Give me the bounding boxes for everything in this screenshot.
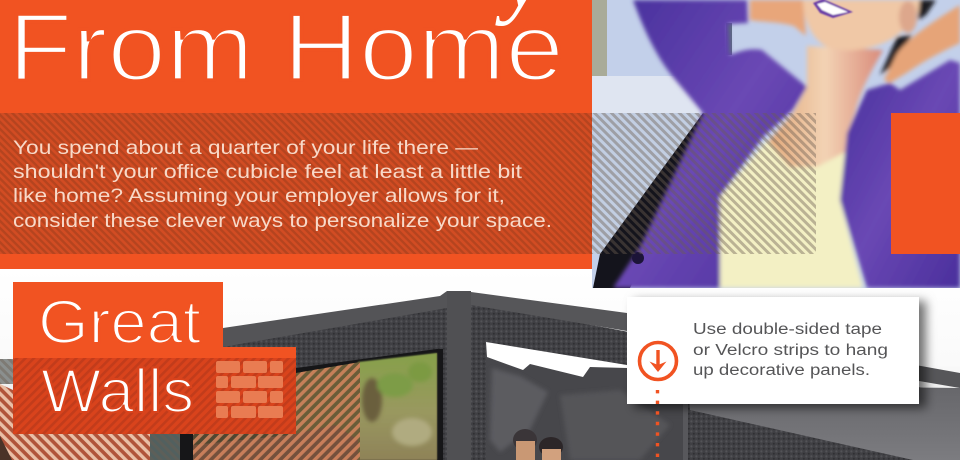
orange square on photo bbox=[891, 113, 960, 254]
office background bbox=[592, 0, 960, 288]
hair and ear bbox=[880, 0, 936, 75]
face bbox=[803, 0, 922, 50]
page background bbox=[0, 269, 960, 460]
framed picture: hillside bbox=[180, 349, 443, 460]
foliage patches bbox=[362, 362, 432, 446]
woman's arm, right bbox=[884, 5, 960, 83]
people in the picture bbox=[513, 429, 563, 460]
left wall with rail and fabric bbox=[195, 291, 447, 460]
callout text bbox=[693, 321, 888, 379]
jacket button bbox=[632, 252, 644, 264]
shirt bbox=[720, 140, 863, 288]
icon: bricks bbox=[216, 361, 283, 418]
corner post bbox=[447, 291, 471, 460]
callout card bbox=[627, 297, 919, 404]
left foreground panel with hatch bbox=[0, 359, 180, 460]
right wall with rail and fabric bbox=[471, 292, 960, 460]
framed picture: people by the rocks bbox=[471, 330, 683, 460]
dotted connector line bbox=[656, 390, 659, 460]
icon: down arrow in circle bbox=[640, 342, 676, 380]
illustration: cubicle walls bbox=[0, 291, 960, 460]
neck bbox=[767, 46, 883, 167]
left jacket sleeve and body bbox=[613, 0, 807, 288]
striped intro panel bbox=[0, 113, 592, 254]
photo: woman stretching at her desk bbox=[592, 0, 960, 288]
heading box bbox=[13, 282, 296, 434]
callout text: Use double-sided tape bbox=[693, 321, 882, 338]
intro text bbox=[13, 137, 552, 232]
mouth bbox=[813, 0, 853, 18]
intro text: like home? Assuming your employer allows for it, bbox=[13, 185, 505, 207]
right jacket bbox=[840, 60, 960, 288]
section heading: Great Walls bbox=[13, 282, 296, 434]
callout text: or Velcro strips to hang bbox=[693, 342, 888, 359]
woman's hand and arm, left bbox=[750, 0, 806, 36]
intro text: shouldn't your office cubicle feel at least a little bit bbox=[13, 161, 523, 183]
orange title block bbox=[0, 0, 592, 269]
intro text: consider these clever ways to personalize your space. bbox=[13, 210, 552, 232]
callout text: up decorative panels. bbox=[693, 362, 870, 379]
heading text: Great bbox=[38, 288, 201, 356]
intro text: You spend about a quarter of your life there — bbox=[13, 137, 479, 159]
heading text bbox=[38, 288, 201, 425]
striped overlay on photo bbox=[592, 113, 816, 254]
heading text: Walls bbox=[41, 357, 194, 425]
